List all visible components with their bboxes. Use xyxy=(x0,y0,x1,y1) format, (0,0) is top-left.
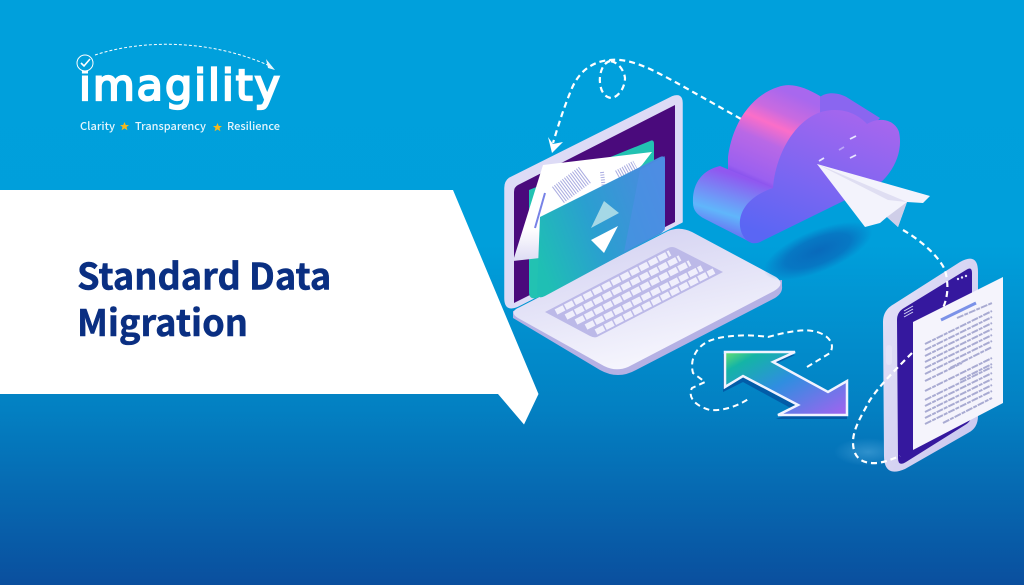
logo: imagility xyxy=(77,44,280,134)
illustration: phone xyxy=(883,259,978,472)
phone side button xyxy=(886,345,892,365)
laptop screen display xyxy=(514,105,675,303)
icon: tagline stars xyxy=(120,122,222,131)
cloud small puff xyxy=(693,166,773,243)
icon: phone dots xyxy=(957,275,967,280)
phone body xyxy=(883,259,978,472)
logo tagline xyxy=(80,118,280,134)
document text lines xyxy=(925,303,992,424)
laptop base xyxy=(513,229,782,375)
icon: check circle xyxy=(77,55,93,71)
keyboard xyxy=(545,247,723,337)
illustration: cloud xyxy=(693,85,900,243)
cloud sparks xyxy=(819,136,856,161)
dashed loop xyxy=(600,61,625,98)
dashed path: around arrows xyxy=(691,330,832,410)
cloud shadow xyxy=(756,210,880,292)
logo tagline: Resilience xyxy=(227,118,280,134)
logo dashed arc xyxy=(95,44,272,67)
document heading bar xyxy=(941,303,976,320)
title: Migration xyxy=(77,295,248,347)
icon: phone menu xyxy=(904,306,913,317)
cloud rear bump xyxy=(820,93,880,135)
logo tagline: Clarity xyxy=(80,118,115,134)
cloud front face xyxy=(740,110,900,243)
dashed path: plane to phone xyxy=(903,230,947,310)
icon: small paper plane xyxy=(266,59,275,70)
dashed path: phone loop xyxy=(853,353,912,463)
logo tagline: Transparency xyxy=(135,118,206,134)
icon: dashed arrow head xyxy=(548,137,563,153)
document on phone xyxy=(913,277,1003,450)
folder side highlight xyxy=(624,156,665,252)
laptop screen frame xyxy=(505,96,682,308)
illustration: laptop xyxy=(505,96,782,375)
title: Standard Data xyxy=(77,248,331,300)
cloud top extrusion xyxy=(728,85,850,200)
white title banner xyxy=(0,190,538,424)
front folder xyxy=(537,156,665,297)
title xyxy=(77,248,331,347)
paper sheet xyxy=(513,152,652,261)
double arrow xyxy=(723,352,847,419)
glow under phone xyxy=(834,438,902,466)
upload triangle xyxy=(591,201,619,228)
teal back folder xyxy=(529,140,654,298)
download triangle xyxy=(591,226,618,253)
phone screen xyxy=(897,269,972,464)
logo wordmark: imagility xyxy=(79,61,280,111)
dashed path: cloud to laptop xyxy=(553,60,741,143)
illustration: paper plane xyxy=(817,164,930,227)
